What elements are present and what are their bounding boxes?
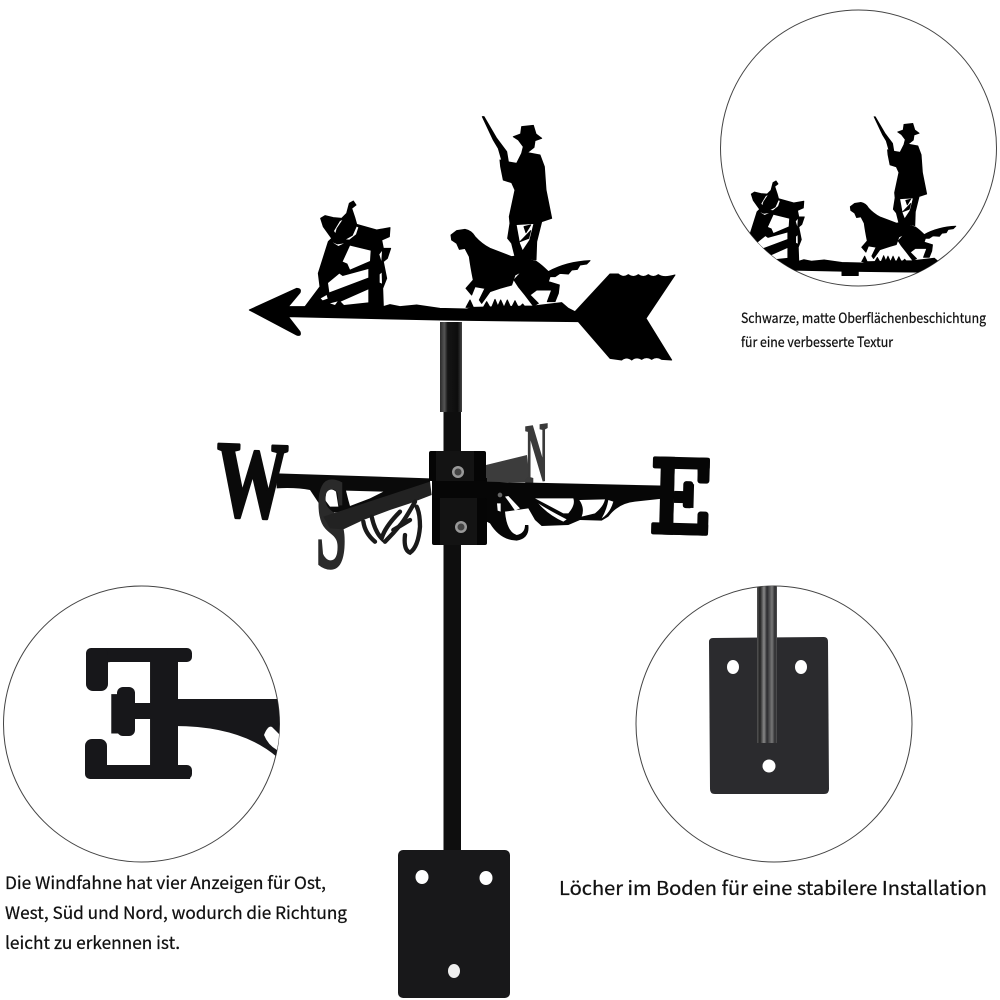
lower bracket with bolt [432,498,487,545]
weather vane arrow with hunter, dog and quail silhouette [249,117,675,360]
mounting plate with three holes [398,850,510,998]
fence post with quail and pointer [305,201,391,307]
south arm, letter S and swirls [316,451,432,596]
caption: surface coating: für eine verbesserte Textur [741,332,893,352]
main pole [440,322,462,852]
pole between brackets [432,478,487,502]
hunter with rifle [482,117,552,260]
zoomed letter E with arm: E [81,604,193,822]
caption: holes for stable installation: Löcher im Boden für eine stabilere Installation [559,874,987,901]
detail circle: letter E [4,586,290,862]
north arm and letter: N [525,404,548,502]
caption: four direction indicators: Die Windfahne hat vier Anzeigen für Ost, [5,869,326,894]
detail circle: surface coating [720,10,997,286]
caption: four direction indicators: West, Süd und Nord, wodurch die Richtung [5,899,347,924]
upper bracket with bolt [429,451,486,481]
zoomed plate with pole and holes [709,586,829,794]
caption: four direction indicators: leicht zu erkennen ist. [5,929,180,954]
zoomed vane silhouette [750,116,956,276]
zoomed letter E with arm [85,648,280,779]
caption: surface coating [741,308,986,352]
north arm and letter [486,404,548,502]
detail circle: mounting plate [636,586,912,862]
caption: four direction indicators [5,869,347,954]
south arm, letter S and swirls: S [316,451,346,596]
west arm with scroll and letter W [214,418,430,541]
arrow shaft and heads [249,274,675,360]
setter dog [451,229,590,307]
east arm with scrollwork and letter E [485,430,711,562]
compass cross with direction letters [214,404,711,596]
east arm with scrollwork and letter E: E [650,430,711,562]
west arm with scroll and letter W: W [214,418,290,541]
